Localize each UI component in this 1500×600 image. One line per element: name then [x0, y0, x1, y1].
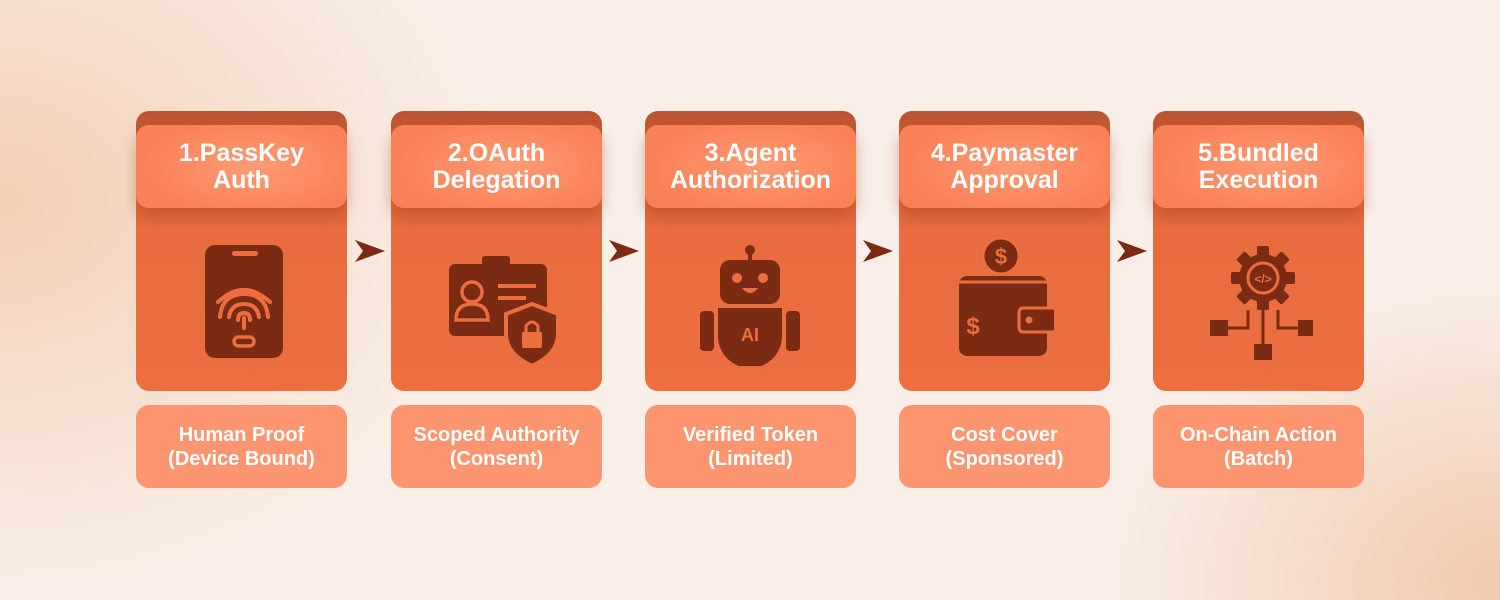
- heading: step 3: Authorization: [670, 166, 831, 194]
- text block: label 1: (Device Bound): [168, 448, 315, 470]
- arrow 1: [355, 240, 385, 262]
- heading: step 1: Auth: [213, 166, 270, 194]
- text block: label 2: [391, 405, 602, 488]
- icon: robot: [700, 245, 800, 366]
- text block: label 2: (Consent): [450, 448, 543, 470]
- heading: step 2: Delegation: [433, 166, 560, 194]
- text block: label 3: (Limited): [708, 448, 793, 470]
- text block: label 5: On-Chain Action: [1180, 424, 1337, 446]
- heading: step 1: 1.PassKey: [179, 138, 304, 166]
- icon: wallet coin: [959, 240, 1054, 356]
- heading: step 5: 5.Bundled: [1198, 138, 1319, 166]
- text block: label 1: Human Proof: [179, 424, 304, 446]
- panel: step 1: [136, 111, 347, 391]
- text block: label 2: Scoped Authority: [414, 424, 579, 446]
- panel: step 4: [899, 111, 1110, 391]
- text block: label 3: Verified Token: [683, 424, 818, 446]
- panel: step 5: [1153, 111, 1364, 391]
- text block: label 1: [136, 405, 347, 488]
- heading: step 1: [136, 125, 347, 208]
- heading: step 3: 3.Agent: [705, 138, 796, 166]
- heading: step 4: [899, 125, 1110, 208]
- text block: label 4: Cost Cover: [951, 424, 1058, 446]
- icon: id card shield: [449, 256, 556, 364]
- heading: step 2: [391, 125, 602, 208]
- icon: wallet coin: $: [966, 313, 980, 340]
- icon: wallet coin: $: [995, 244, 1007, 269]
- panel: step 2: [391, 111, 602, 391]
- heading: step 5: [1153, 125, 1364, 208]
- arrow 3: [863, 240, 893, 262]
- text block: label 4: [899, 405, 1110, 488]
- text block: label 3: [645, 405, 856, 488]
- heading: step 3: [645, 125, 856, 208]
- arrow 2: [609, 240, 639, 262]
- text block: label 5: [1153, 405, 1364, 488]
- arrow 4: [1117, 240, 1147, 262]
- icon: phone fingerprint: [205, 245, 283, 358]
- icon: gear code network: </>: [1254, 272, 1272, 286]
- text block: label 5: (Batch): [1224, 448, 1293, 470]
- icon: gear code network: [1210, 246, 1313, 360]
- panel: step 3: [645, 111, 856, 391]
- heading: step 2: 2.OAuth: [448, 138, 545, 166]
- heading: step 4: Approval: [950, 166, 1059, 194]
- heading: step 4: 4.Paymaster: [931, 138, 1078, 166]
- icon: robot: AI: [741, 325, 759, 345]
- heading: step 5: Execution: [1199, 166, 1318, 194]
- text block: label 4: (Sponsored): [946, 448, 1063, 470]
